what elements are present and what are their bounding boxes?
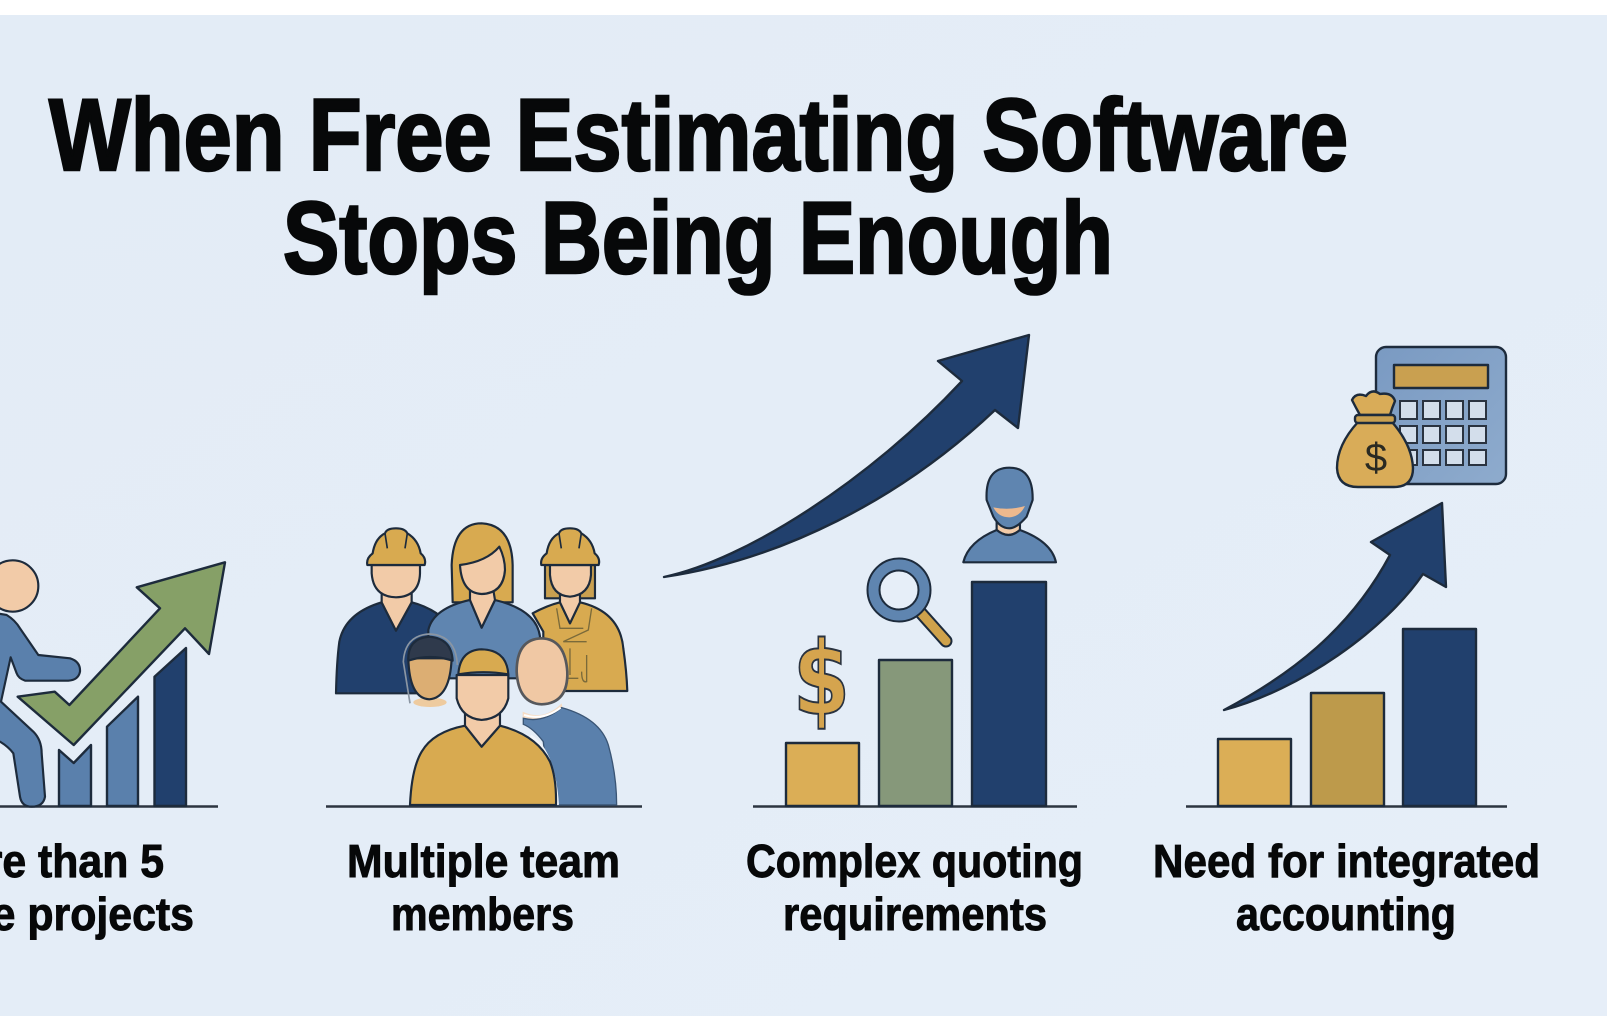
chart: three rising bars [1186, 629, 1507, 806]
panel: multiple team members [326, 523, 642, 940]
panel: need for integrated accounting [1153, 347, 1540, 940]
label: need for integrated accounting [1153, 835, 1540, 940]
panel: more than 5 active projects [0, 560, 225, 940]
label: complex quoting requirements: Complex quoting [746, 835, 1083, 887]
label: multiple team members [347, 835, 620, 940]
icon: calculator [1376, 347, 1506, 484]
icon: money bag [1337, 391, 1413, 487]
icon: group of workers [326, 523, 642, 806]
icon: curved growth arrow [1224, 503, 1446, 710]
label: more than 5 active projects [0, 835, 194, 940]
title [49, 78, 1348, 295]
label: multiple team members: members [391, 888, 574, 940]
icon: money bag: $ [1365, 436, 1387, 480]
icon: curved growth arrow [664, 335, 1029, 577]
chart: rising bars with dollar, magnifier and worker: $ [793, 620, 850, 739]
title: When Free Estimating Software [49, 78, 1348, 192]
icon: bar chart with climbing person and green arrow [0, 560, 225, 807]
label: need for integrated accounting: accounting [1236, 888, 1456, 940]
label: need for integrated accounting: Need for integrated [1153, 835, 1540, 887]
panel: complex quoting requirements [664, 335, 1083, 940]
label: complex quoting requirements: requirements [783, 888, 1047, 940]
title: Stops Being Enough [283, 181, 1113, 295]
chart: rising bars with dollar, magnifier and worker [753, 468, 1077, 806]
label: complex quoting requirements [746, 835, 1083, 940]
label: multiple team members: Multiple team [347, 835, 620, 887]
